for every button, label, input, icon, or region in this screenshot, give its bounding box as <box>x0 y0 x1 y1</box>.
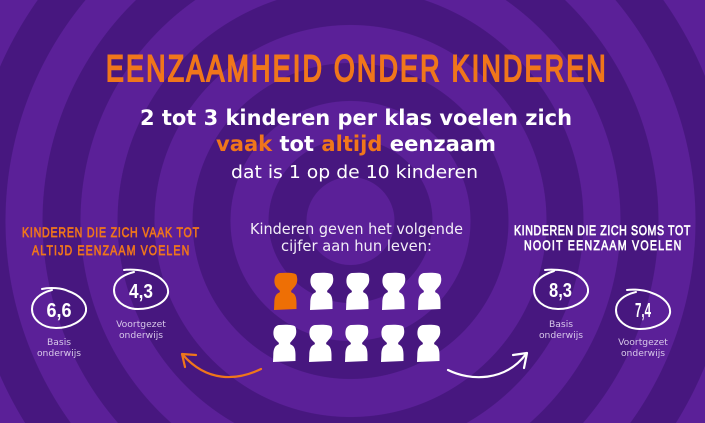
heading: sometimes to never lonely: KINDEREN DIE ZICH SOMS TOT <box>514 223 691 238</box>
title: EENZAAMHEID ONDER KINDEREN <box>106 48 606 89</box>
score: primary 6,6: onderwijs <box>37 348 81 359</box>
headline text <box>140 106 572 183</box>
panel: centre intro text: cijfer aan hun leven: <box>281 237 432 255</box>
arrow: white <box>448 353 527 377</box>
score: primary 8,3 <box>534 270 588 341</box>
score: primary 8,3: 8,3 <box>549 280 572 302</box>
heading: sometimes to never lonely: NOOIT EENZAAM VOELEN <box>524 238 681 253</box>
score: primary 6,6: Basis <box>47 337 71 348</box>
panel: sometimes lonely <box>448 223 691 377</box>
heading: often to always lonely <box>22 225 199 258</box>
headline text: dat is 1 op de 10 kinderen <box>231 163 478 183</box>
panel: often lonely <box>22 225 261 377</box>
score: primary 8,3: Basis <box>549 319 573 330</box>
pictogram: ten children, one highlighted <box>273 273 441 362</box>
panel: centre intro text <box>250 220 463 255</box>
heading: often to always lonely: KINDEREN DIE ZICH VAAK TOT <box>22 225 199 240</box>
score: primary 6,6 <box>32 288 86 359</box>
score: secondary 4,3 <box>114 270 168 341</box>
score: secondary 7,4 <box>616 290 670 359</box>
arrow: orange <box>182 354 261 377</box>
headline text: vaak tot altijd eenzaam <box>216 132 496 156</box>
score: primary 6,6: 6,6 <box>46 300 72 322</box>
score: secondary 4,3: 4,3 <box>129 281 153 303</box>
score: secondary 7,4: onderwijs <box>621 348 665 359</box>
score: secondary 7,4: Voortgezet <box>618 337 668 348</box>
panel: centre intro text: Kinderen geven het volgende <box>250 220 463 238</box>
headline text: 2 tot 3 kinderen per klas voelen zich <box>140 106 572 130</box>
score: secondary 4,3: Voortgezet <box>116 319 166 330</box>
heading: sometimes to never lonely <box>514 223 691 253</box>
heading: often to always lonely: ALTIJD EENZAAM VOELEN <box>32 243 189 258</box>
score: secondary 7,4: 7,4 <box>635 300 651 322</box>
score: secondary 4,3: onderwijs <box>119 330 163 341</box>
score: primary 8,3: onderwijs <box>539 330 583 341</box>
